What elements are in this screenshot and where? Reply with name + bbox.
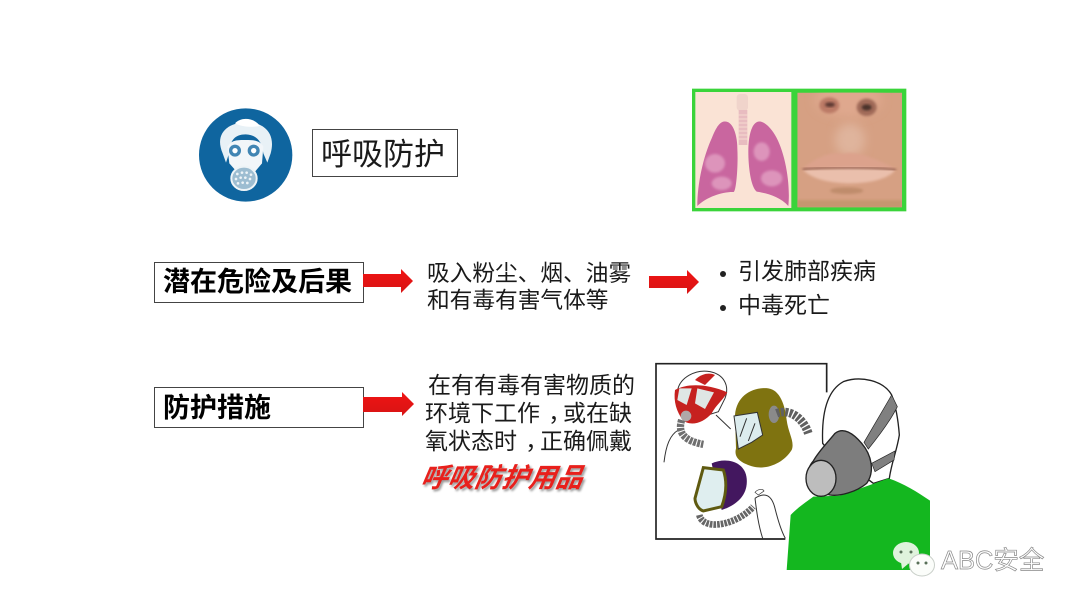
list: consequences [720,258,876,318]
label: protective measures [154,387,364,428]
lungs image [695,92,791,208]
text: causes [427,260,631,313]
text: causes: 吸入粉尘、烟、油雾 [427,260,631,286]
arrow: causes to consequences [649,270,699,294]
text: measures description: 环境下工作 ，或在缺 [425,400,632,426]
text: causes: 和有毒有害气体等 [427,287,608,313]
text: measures description: 氧状态时 ，正确佩戴 [425,428,632,454]
list: consequences: 中毒死亡 [738,292,830,318]
olive hood [734,388,808,468]
mouth photo [797,83,902,208]
red full-face mask [664,371,731,462]
arrow: measures to description [363,392,414,416]
label: protective measures: 防护措施 [163,393,271,423]
picture frame [656,364,827,539]
text: measures description: 在有有毒有害物质的 [428,372,635,398]
purple breathing apparatus [695,460,785,538]
photo panel: lungs and mouth [692,88,906,212]
list: consequences: 引发肺部疾病 [738,258,876,284]
worker with half mask [787,379,930,570]
icon: chat bubbles watermark [893,542,935,576]
watermark text: ABC安全 [941,547,1044,575]
illustration: respirator types [655,362,930,570]
title: 呼吸防护 [321,137,445,172]
label: hazards and consequences: 潜在危险及后果 [163,267,352,297]
title [312,129,458,177]
icon: respirator mandatory sign [199,108,292,202]
highlighted text: respiratory protection equipment: 呼吸防护用品 [418,463,586,493]
label: hazards and consequences [154,262,364,303]
text: measures description [425,372,635,454]
arrow: hazards to causes [363,269,413,293]
